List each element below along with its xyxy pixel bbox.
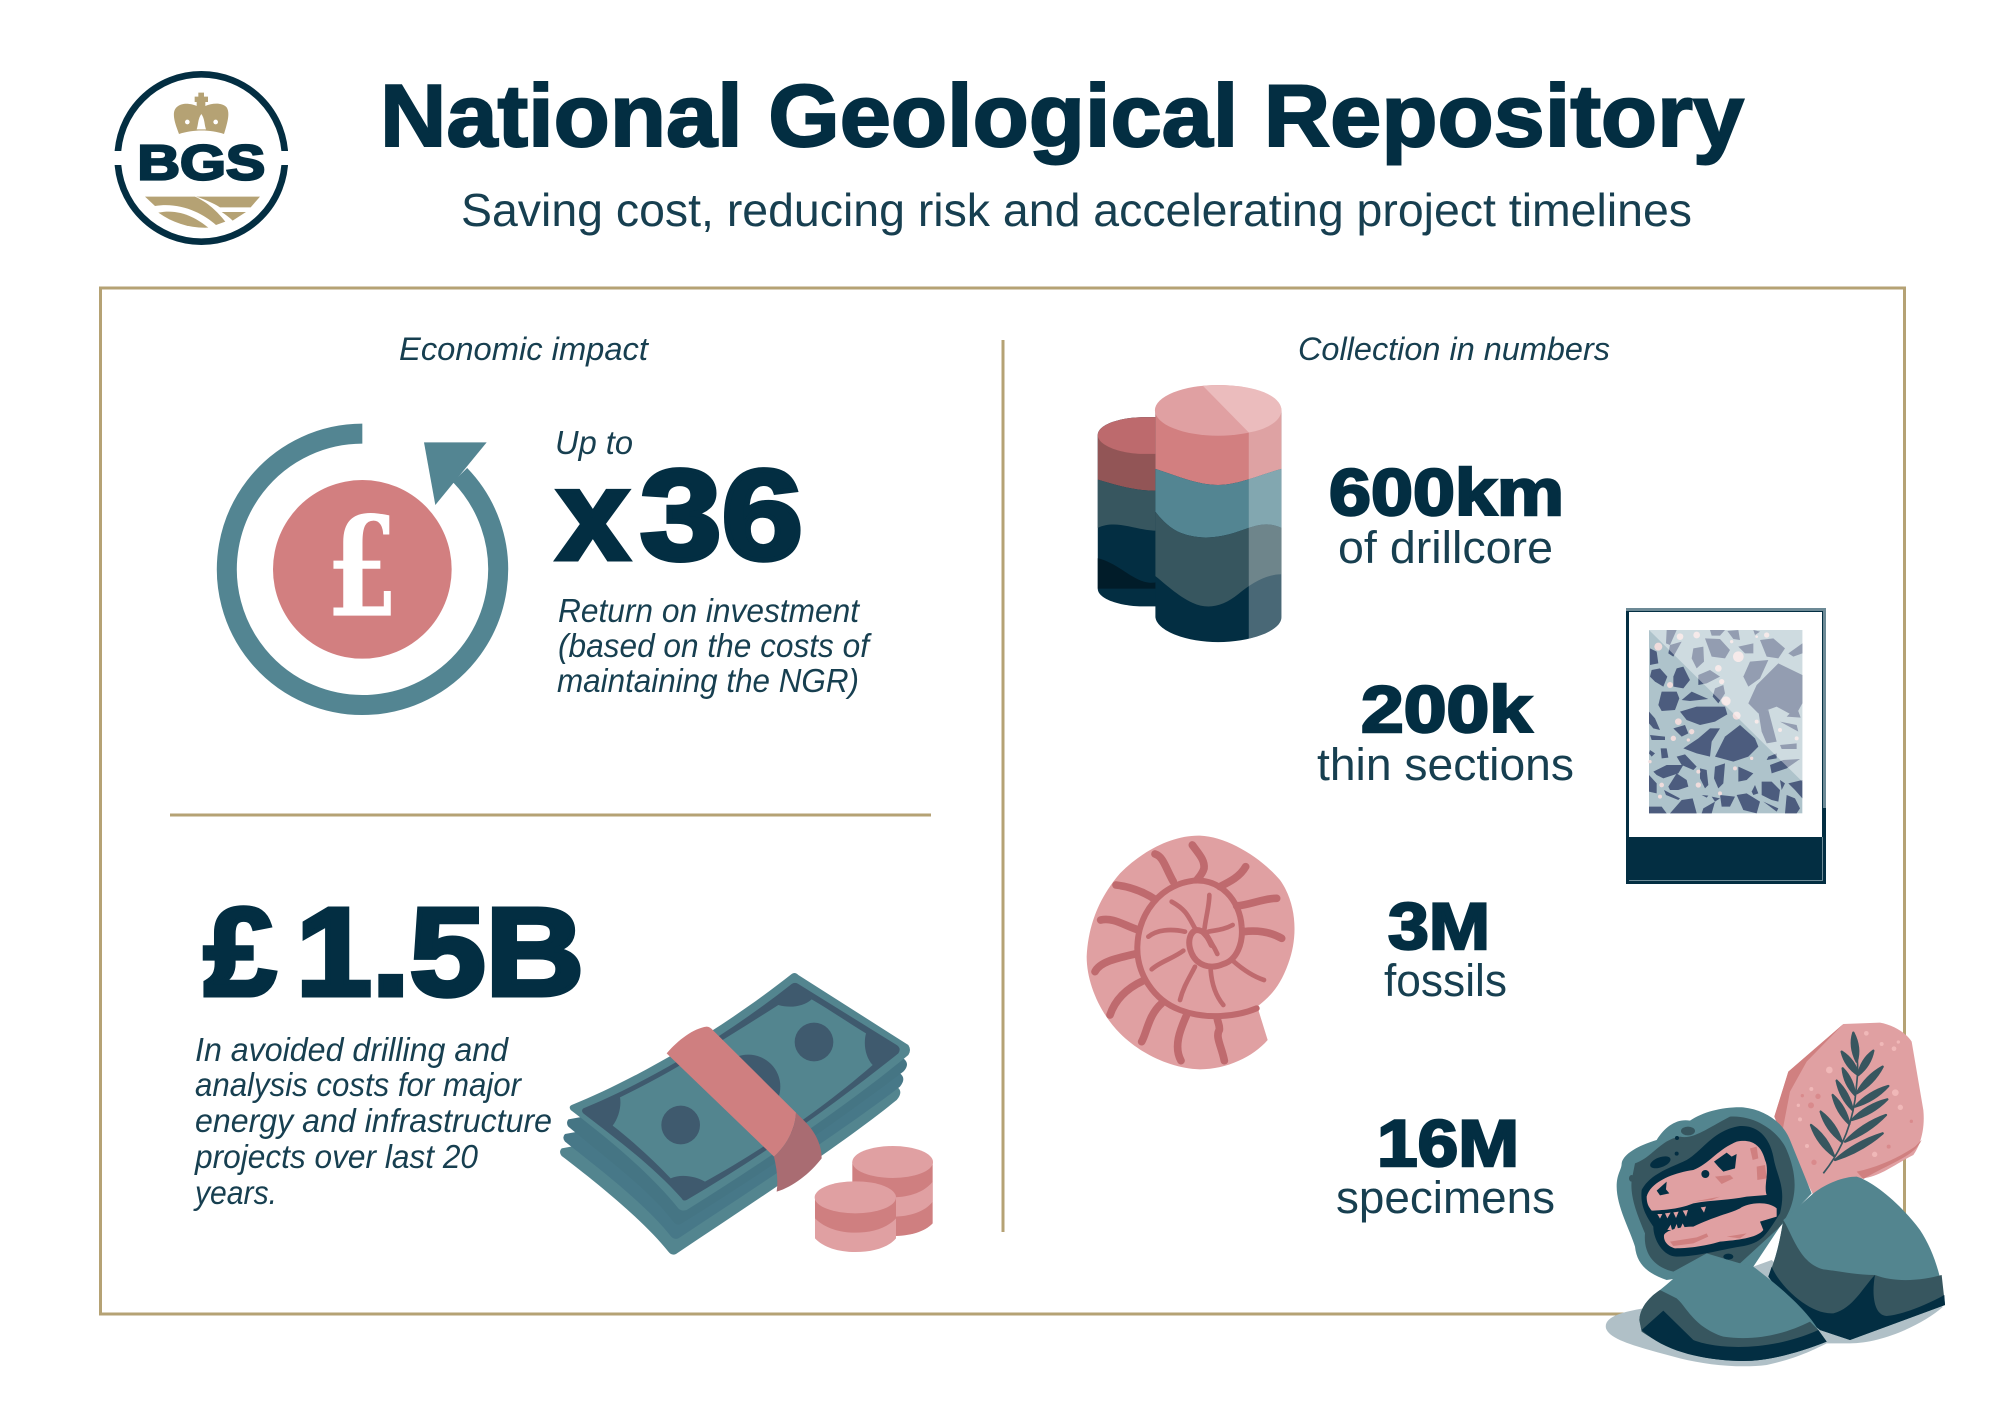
heading: collection in numbers: Collection in numbers [1298, 331, 1610, 367]
front coin stack [815, 1181, 896, 1252]
200k value: 200k [1361, 672, 1532, 746]
avoided costs description [193, 1031, 552, 1211]
pound sign: £ [326, 486, 398, 649]
avoided costs description: In avoided drilling and [195, 1031, 510, 1068]
paper band [667, 1027, 822, 1192]
stat: drillcore [1329, 455, 1564, 573]
600km value: 600km [1329, 455, 1564, 529]
x36 figure [557, 444, 803, 587]
plant fossil stone [1774, 1023, 1924, 1195]
BGS logo [110, 74, 293, 242]
icon: banknotes and coins [560, 973, 933, 1255]
text block: return figure [555, 424, 873, 699]
text block: avoided costs [193, 883, 584, 1211]
avoided costs description: analysis costs for major [195, 1066, 523, 1103]
back coin stack [852, 1146, 933, 1236]
illustration: rocks and fossils [1606, 1023, 1945, 1366]
x36 figure: 36 [640, 444, 803, 587]
logo letters: BGS [137, 135, 265, 190]
avoided costs description: projects over last 20 [194, 1138, 479, 1175]
icon: thin section slide [1626, 608, 1826, 884]
heading: economic impact: Economic impact [399, 331, 649, 367]
icon: ammonite fossil [1087, 836, 1295, 1069]
return description: (based on the costs of [558, 627, 873, 664]
specimens label: specimens [1336, 1172, 1555, 1223]
avoided costs description: energy and infrastructure [195, 1102, 552, 1139]
small core [1098, 417, 1157, 606]
title: National Geological Repository [380, 66, 1744, 165]
icon: return on investment cycle [227, 434, 498, 705]
1.5B figure [204, 883, 584, 1022]
logo hills [145, 197, 260, 228]
logo crown [174, 93, 228, 134]
stat: specimens [1336, 1106, 1555, 1223]
fern leaf [1811, 1033, 1888, 1173]
drillcore label: of drillcore [1338, 522, 1553, 573]
stat: thin sections [1317, 672, 1574, 790]
x36 figure: x [557, 444, 629, 587]
1.5B figure: 1.5B [296, 883, 584, 1022]
stat: fossils [1384, 889, 1507, 1006]
avoided costs description: years. [193, 1174, 277, 1211]
fossils label: fossils [1384, 955, 1507, 1006]
thin sections label: thin sections [1317, 739, 1574, 790]
16M value: 16M [1377, 1106, 1519, 1180]
up to label: Up to [555, 424, 633, 461]
return description: Return on investment [558, 592, 861, 629]
right boulder [1768, 1177, 1945, 1340]
ground shadow [1606, 1260, 1943, 1366]
1.5B figure: £ [204, 883, 276, 1022]
icon: drill cores [1098, 385, 1281, 642]
subtitle: Saving cost, reducing risk and accelerating project timelines [461, 184, 1692, 236]
large core [1155, 385, 1281, 642]
left boulder [1639, 1255, 1827, 1361]
rock thin section texture [1648, 630, 1802, 813]
dinosaur skull fossil rock [1617, 1107, 1812, 1280]
3M value: 3M [1388, 889, 1490, 963]
return description [557, 592, 873, 699]
return description: maintaining the NGR) [557, 662, 859, 699]
